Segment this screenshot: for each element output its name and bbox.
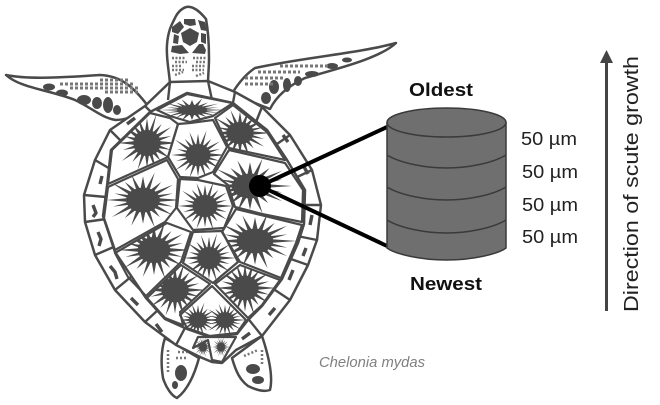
carapace (84, 81, 321, 363)
marginal scute dividers (84, 81, 321, 345)
right front flipper (233, 43, 396, 109)
layer thickness labels: 50 µm (522, 226, 578, 247)
scute: right costal 1 (211, 105, 285, 160)
left front flipper (6, 75, 148, 120)
layer thickness labels (521, 128, 578, 247)
scute: left costal 2 (104, 160, 182, 250)
layer thickness labels: 50 µm (522, 194, 578, 215)
scute: left costal 1 (108, 113, 178, 184)
sampling point (249, 175, 271, 197)
scute: vertebral 3 (177, 179, 234, 231)
scute: vertebral 5 (178, 286, 246, 337)
species name: Chelonia mydas (319, 354, 425, 371)
layer thickness labels: 50 µm (522, 161, 578, 182)
label: newest: Newest (410, 274, 482, 294)
scute: right costal 3 (216, 209, 302, 278)
head (167, 7, 209, 84)
layer thickness labels: 50 µm (521, 128, 577, 149)
scute: left costal 3 (115, 221, 192, 296)
scute layers cylinder (387, 108, 506, 260)
scute: right costal 4 (215, 260, 280, 318)
pointer lines (260, 127, 387, 246)
axis label: Direction of scute growth (620, 56, 643, 312)
scute ring (103, 93, 305, 337)
arrow: growth direction (600, 50, 613, 311)
turtle illustration (6, 7, 396, 398)
right rear flipper (232, 336, 271, 391)
scute: vertebral 2 (168, 120, 227, 180)
scute: left costal 4 (146, 262, 210, 325)
label: oldest: Oldest (409, 80, 473, 100)
scute: right costal 2 (211, 150, 303, 222)
left rear flipper (162, 338, 199, 398)
scute: supracaudal (193, 337, 236, 362)
marginal scute marks (93, 118, 312, 339)
scute: vertebral 4 (183, 231, 238, 283)
scute: vertebral 1 (157, 94, 233, 122)
